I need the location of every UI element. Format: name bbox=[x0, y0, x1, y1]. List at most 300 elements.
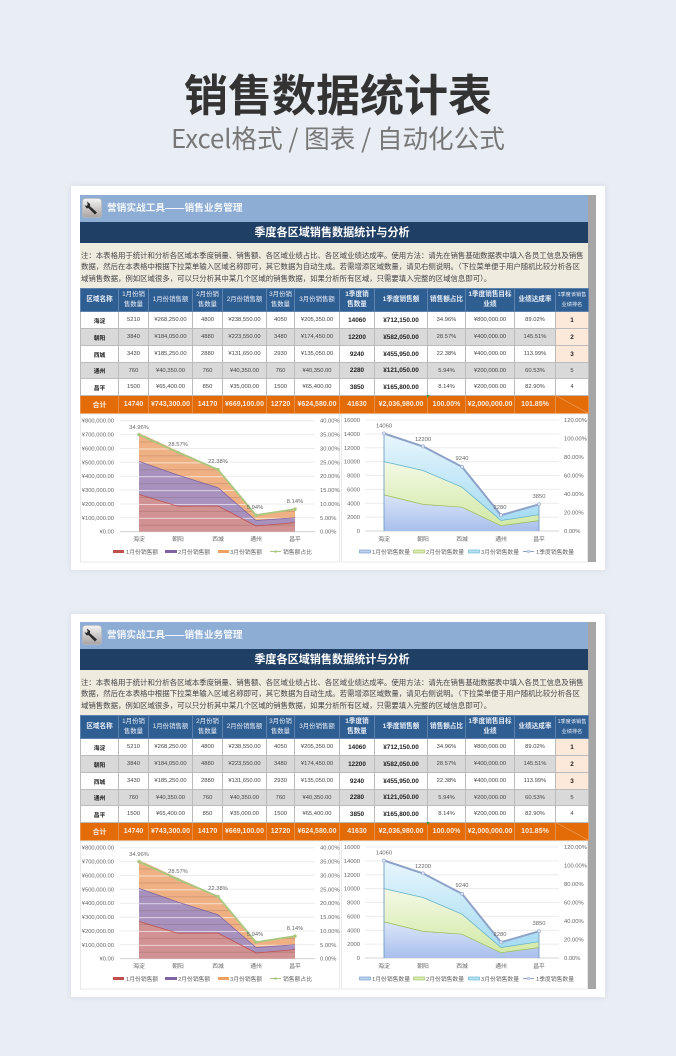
right axis: 5.00% bbox=[320, 943, 336, 949]
data labels: 22.38% bbox=[208, 886, 228, 892]
data table: 28.57% bbox=[437, 761, 456, 767]
category axis: 西城 bbox=[212, 963, 224, 970]
data table: ¥712,150.00 bbox=[383, 316, 419, 324]
data table: ¥40,350.00 bbox=[230, 368, 259, 374]
left axis: 10000 bbox=[344, 460, 360, 466]
data table: ¥238,550.00 bbox=[228, 744, 261, 750]
right axis: 40.00% bbox=[564, 919, 584, 925]
data table: 1 bbox=[570, 744, 574, 750]
data table: ¥800,000.00 bbox=[474, 317, 506, 323]
data table: 售数量 bbox=[271, 301, 290, 308]
left axis: 14000 bbox=[344, 432, 360, 438]
data table: ¥40,350.00 bbox=[302, 794, 332, 800]
left axis: 6000 bbox=[347, 487, 360, 493]
data labels: 9240 bbox=[456, 883, 468, 889]
left axis: ¥700,000.00 bbox=[82, 860, 114, 866]
line: quarterly quantity bbox=[382, 859, 541, 944]
category axis: 朝阳 bbox=[172, 535, 184, 543]
data table: 4 bbox=[570, 384, 574, 390]
data table: 14060 bbox=[348, 744, 366, 750]
data table: 2280 bbox=[350, 794, 364, 801]
data labels: 8.14% bbox=[287, 499, 303, 505]
data labels: 28.57% bbox=[168, 442, 188, 448]
data table: 1500 bbox=[274, 384, 287, 390]
category axis bbox=[378, 962, 545, 970]
legend: 1月份销售数量 bbox=[372, 975, 410, 983]
line: quarterly quantity bbox=[382, 432, 541, 517]
data table: 4800 bbox=[201, 317, 214, 323]
data table: ¥40,350.00 bbox=[230, 794, 259, 800]
data labels: 28.57% bbox=[168, 869, 188, 875]
data table: ¥200,000.00 bbox=[474, 811, 506, 817]
data table: ¥35,000.00 bbox=[230, 811, 259, 817]
heading: 季度各区域销售数据统计与分析 bbox=[254, 227, 410, 239]
category axis: 海淀 bbox=[378, 962, 390, 970]
left axis: 8000 bbox=[347, 900, 360, 906]
data table: 113.99% bbox=[524, 351, 546, 357]
charts bbox=[80, 822, 588, 990]
data table: 1月份销 bbox=[122, 290, 145, 298]
data table: ¥2,000,000.00 bbox=[468, 828, 512, 835]
legend: 1季度销售数量 bbox=[536, 548, 574, 556]
data table: 4 bbox=[570, 811, 574, 817]
legend: 1月份销售数量 bbox=[372, 548, 410, 556]
data table: ¥743,300.00 bbox=[151, 401, 190, 408]
data table: 5.94% bbox=[438, 794, 455, 800]
data table: 海淀 bbox=[94, 318, 105, 324]
category axis: 海淀 bbox=[133, 962, 145, 970]
data table: 4050 bbox=[274, 317, 287, 323]
right axis bbox=[564, 845, 587, 962]
data table: 850 bbox=[203, 384, 212, 390]
data table: 3850 bbox=[350, 810, 364, 818]
data table: ¥35,000.00 bbox=[230, 384, 259, 390]
data table: 760 bbox=[203, 794, 212, 800]
data table: 4050 bbox=[274, 744, 287, 750]
data table: 1500 bbox=[274, 811, 287, 817]
data table: ¥40,350.00 bbox=[156, 368, 185, 374]
left axis: ¥500,000.00 bbox=[82, 460, 114, 466]
panel: spreadsheet screenshot 2 bbox=[71, 614, 605, 997]
left axis: 0 bbox=[357, 529, 360, 535]
data table: 3月份销 bbox=[269, 718, 292, 724]
data table: ¥200,000.00 bbox=[474, 384, 506, 390]
data table: 3月份销售额 bbox=[299, 296, 335, 303]
data table: 14740 bbox=[124, 828, 143, 835]
data table: ¥131,650.00 bbox=[228, 351, 261, 357]
left axis: 6000 bbox=[347, 914, 360, 920]
header bar bbox=[80, 622, 588, 649]
legend: 3月份销售数量 bbox=[481, 975, 519, 983]
category axis: 昌平 bbox=[289, 536, 301, 543]
left axis: ¥100,000.00 bbox=[82, 516, 114, 522]
charts bbox=[80, 394, 588, 562]
data labels: 8.14% bbox=[287, 926, 303, 932]
panel: spreadsheet screenshot 1 bbox=[71, 186, 605, 570]
right gray strip bbox=[588, 622, 596, 989]
data table: 西城 bbox=[94, 352, 105, 358]
left axis: 16000 bbox=[344, 845, 360, 851]
data table: 760 bbox=[203, 368, 212, 374]
data table: 2 bbox=[570, 760, 574, 768]
icon: wrench bbox=[82, 625, 102, 645]
data table: 101.85% bbox=[521, 401, 549, 408]
category axis: 通州 bbox=[495, 962, 507, 970]
data table: ¥174,450.00 bbox=[301, 334, 333, 340]
data table: 12200 bbox=[348, 334, 366, 340]
data labels bbox=[129, 425, 303, 511]
right axis: 80.00% bbox=[564, 455, 584, 461]
data table: 西城 bbox=[94, 780, 105, 786]
header bar bbox=[80, 195, 588, 222]
left axis: ¥300,000.00 bbox=[82, 915, 114, 921]
left axis: 2000 bbox=[347, 515, 360, 521]
right axis: 15.00% bbox=[320, 488, 340, 494]
data table: ¥223,550.00 bbox=[228, 761, 261, 767]
right axis: 20.00% bbox=[320, 474, 340, 480]
data table: 区域名称 bbox=[86, 296, 113, 303]
data table: 9240 bbox=[350, 778, 364, 784]
category axis: 朝阳 bbox=[172, 962, 184, 970]
data table: 昌平 bbox=[94, 386, 105, 392]
legend bbox=[113, 548, 312, 556]
data table: ¥2,036,980.00 bbox=[379, 401, 423, 408]
right axis: 20.00% bbox=[320, 901, 340, 907]
data table: ¥135,050.00 bbox=[301, 778, 333, 784]
data table: 业绩 bbox=[483, 301, 497, 308]
data table: 2月份销售额 bbox=[227, 296, 262, 303]
data labels: 34.96% bbox=[129, 425, 149, 431]
data labels: 5.94% bbox=[247, 932, 263, 938]
right axis: 30.00% bbox=[320, 446, 340, 452]
data table: ¥400,000.00 bbox=[474, 351, 506, 357]
note text bbox=[80, 243, 588, 288]
left axis: ¥0.00 bbox=[99, 957, 114, 963]
data table: ¥205,350.00 bbox=[301, 317, 333, 323]
data table: 5 bbox=[570, 368, 574, 374]
category axis: 海淀 bbox=[133, 535, 145, 543]
data table: ¥121,050.00 bbox=[383, 794, 419, 801]
data table: ¥669,100.00 bbox=[225, 401, 264, 408]
category axis: 通州 bbox=[250, 962, 262, 970]
legend bbox=[113, 975, 312, 983]
right axis: 10.00% bbox=[320, 502, 340, 508]
data table: ¥65,400.00 bbox=[156, 811, 185, 817]
data table: ¥582,050.00 bbox=[383, 334, 419, 340]
data table: 2月份销售额 bbox=[227, 723, 262, 730]
data table: ¥65,400.00 bbox=[302, 384, 332, 390]
data table: ¥65,400.00 bbox=[302, 811, 332, 817]
data table: 3430 bbox=[127, 778, 140, 784]
right axis: 0.00% bbox=[564, 956, 580, 962]
data table: 22.38% bbox=[437, 351, 456, 357]
left axis: 10000 bbox=[344, 887, 360, 893]
data table: ¥743,300.00 bbox=[151, 828, 190, 835]
right axis: 5.00% bbox=[320, 516, 336, 522]
data table: 1月份销售额 bbox=[153, 296, 188, 303]
data table: 1月份销 bbox=[122, 718, 145, 724]
data table: 3850 bbox=[350, 384, 364, 390]
data table: 3840 bbox=[127, 761, 140, 767]
right axis: 20.00% bbox=[564, 510, 584, 516]
note text: 域销售数据，例如区域很多，可以只分析其中某几个区域的销售数据，如果分析所有区域，只需要填入完整的区域信息即可）。 bbox=[81, 701, 491, 710]
note text: 数据，然后在本表格中根据下拉菜单输入区域名称即可，其它数据为自动生成。若需增添区域数量，请见右侧说明。（下拉菜单便于用户随机比较分析各区 bbox=[81, 262, 580, 271]
left axis: ¥800,000.00 bbox=[82, 419, 114, 425]
left axis: 2000 bbox=[347, 942, 360, 948]
data table: 3430 bbox=[127, 351, 140, 357]
left axis: ¥200,000.00 bbox=[82, 502, 114, 508]
data labels: 3850 bbox=[533, 494, 545, 500]
right axis: 80.00% bbox=[564, 882, 584, 888]
data table: 销售额占比 bbox=[430, 296, 463, 303]
data table: 通州 bbox=[94, 369, 105, 375]
category axis: 西城 bbox=[456, 536, 468, 543]
data table: 2月份销 bbox=[196, 718, 219, 724]
data table: ¥800,000.00 bbox=[474, 744, 506, 750]
data table: 41630 bbox=[347, 828, 367, 835]
left axis: 0 bbox=[357, 956, 360, 962]
data table: 14740 bbox=[124, 401, 143, 408]
data table: 9240 bbox=[350, 350, 364, 358]
data table: 5.94% bbox=[438, 368, 455, 374]
data table: 2880 bbox=[201, 778, 214, 784]
data table: 售数量 bbox=[198, 301, 217, 308]
data table: ¥669,100.00 bbox=[225, 828, 264, 835]
data table: ¥624,580.00 bbox=[298, 828, 336, 835]
data table: ¥400,000.00 bbox=[474, 761, 506, 767]
data table: 4880 bbox=[201, 334, 214, 340]
data table: 60.53% bbox=[525, 794, 545, 800]
data labels: 14060 bbox=[376, 424, 392, 430]
data table: 3480 bbox=[274, 334, 287, 340]
data table: 5210 bbox=[127, 317, 140, 323]
right axis: 60.00% bbox=[564, 900, 584, 906]
left axis: 14000 bbox=[344, 859, 360, 865]
data table: 1季度销 bbox=[345, 290, 369, 298]
right axis: 0.00% bbox=[320, 957, 336, 963]
data table: 售数量 bbox=[347, 301, 367, 308]
data table: ¥455,950.00 bbox=[383, 350, 419, 358]
legend: 2月份销售数量 bbox=[426, 975, 464, 983]
data table: 业绩达成率 bbox=[519, 723, 551, 730]
data table: 1季度销售额 bbox=[383, 296, 419, 303]
line: sales share bbox=[137, 433, 297, 517]
data table: 22.38% bbox=[437, 778, 456, 784]
legend: 1月份销售额 bbox=[126, 975, 158, 983]
category axis: 通州 bbox=[250, 535, 262, 543]
data table: 34.96% bbox=[437, 317, 456, 323]
left axis: ¥700,000.00 bbox=[82, 433, 114, 439]
data table: 1季度销售目标 bbox=[468, 718, 512, 724]
data table: 5210 bbox=[127, 744, 140, 750]
category axis: 朝阳 bbox=[417, 535, 429, 543]
data labels: 2280 bbox=[494, 505, 506, 511]
category axis bbox=[378, 535, 545, 543]
data table: 业绩排名 bbox=[562, 302, 582, 308]
data table: 业绩排名 bbox=[562, 729, 582, 735]
data labels bbox=[376, 850, 545, 938]
data table: 业绩 bbox=[483, 728, 497, 735]
data table: 34.96% bbox=[437, 744, 456, 750]
data table: 区域名称 bbox=[86, 723, 113, 730]
data table: 2 bbox=[570, 334, 574, 340]
legend bbox=[360, 548, 574, 556]
data table: ¥582,050.00 bbox=[383, 760, 419, 768]
data table: 14170 bbox=[198, 828, 217, 835]
subtitle: Excel格式 / 图表 / 自动化公式 bbox=[171, 119, 505, 156]
data table: 760 bbox=[276, 368, 285, 374]
data table: ¥712,150.00 bbox=[383, 744, 419, 750]
data table: 1 bbox=[570, 316, 574, 324]
data table: 145.51% bbox=[524, 761, 546, 767]
data table: 101.85% bbox=[521, 828, 549, 835]
left axis: ¥0.00 bbox=[99, 530, 114, 536]
data table: 113.99% bbox=[524, 778, 546, 784]
note text: 注：本表格用于统计和分析各区域本季度销量、销售额、各区域业绩占比、各区域业绩达成率。使用方法：请先在销售基础数据表中填入各员工信息及销售 bbox=[81, 678, 584, 687]
data table: 14170 bbox=[198, 401, 217, 408]
line: sales share bbox=[137, 860, 297, 944]
data table: 2月份销 bbox=[196, 290, 219, 298]
legend: 3月份销售额 bbox=[230, 548, 262, 556]
data table: 2930 bbox=[274, 351, 287, 357]
data table bbox=[80, 715, 589, 841]
data table: 售数量 bbox=[198, 728, 217, 735]
data table: ¥268,250.00 bbox=[154, 317, 187, 323]
right axis: 0.00% bbox=[564, 529, 580, 535]
left axis bbox=[344, 845, 360, 962]
left axis: ¥600,000.00 bbox=[82, 446, 114, 452]
right axis bbox=[320, 419, 340, 536]
heading bbox=[80, 649, 588, 670]
data table: 合计 bbox=[92, 402, 106, 408]
category axis: 昌平 bbox=[533, 963, 545, 970]
right axis: 40.00% bbox=[564, 492, 584, 498]
data table: 2880 bbox=[201, 351, 214, 357]
data table: 5 bbox=[570, 794, 574, 800]
legend: 1月份销售额 bbox=[126, 548, 158, 556]
note text: 域销售数据，例如区域很多，可以只分析其中某几个区域的销售数据，如果分析所有区域，只需要填入完整的区域信息即可）。 bbox=[81, 274, 491, 283]
data table: ¥40,350.00 bbox=[302, 368, 332, 374]
data table: 业绩达成率 bbox=[519, 296, 551, 303]
data table: 100.00% bbox=[433, 828, 460, 835]
left axis: 16000 bbox=[344, 418, 360, 424]
category axis: 西城 bbox=[212, 536, 224, 543]
data table: 1500 bbox=[127, 384, 140, 390]
data table: 1季度该销售 bbox=[558, 292, 586, 298]
left axis: ¥100,000.00 bbox=[82, 943, 114, 949]
right axis: 100.00% bbox=[564, 864, 587, 870]
data table: 朝阳 bbox=[94, 336, 105, 342]
category axis bbox=[133, 962, 301, 970]
data table: ¥184,050.00 bbox=[154, 334, 187, 340]
left axis: 4000 bbox=[347, 928, 360, 934]
data table: ¥165,800.00 bbox=[383, 384, 419, 390]
data table: ¥121,050.00 bbox=[383, 367, 419, 374]
right axis: 35.00% bbox=[320, 433, 340, 439]
data table: ¥185,250.00 bbox=[154, 351, 187, 357]
data table: 1月份销售额 bbox=[153, 723, 188, 730]
data labels: 14060 bbox=[376, 850, 392, 856]
data table: 760 bbox=[129, 794, 138, 800]
data table: ¥223,550.00 bbox=[228, 334, 261, 340]
note text bbox=[80, 670, 588, 715]
category axis bbox=[133, 535, 301, 543]
data table: 89.02% bbox=[525, 744, 545, 750]
data table: ¥238,550.00 bbox=[228, 317, 261, 323]
data table: 12200 bbox=[348, 760, 366, 768]
data table: ¥135,050.00 bbox=[301, 351, 333, 357]
chart: sales quantity area bbox=[342, 841, 588, 989]
data table: 售数量 bbox=[124, 301, 143, 308]
right axis: 120.00% bbox=[564, 418, 587, 424]
data table: 3月份销 bbox=[269, 290, 292, 298]
header bar title: 营销实战工具——销售业务管理 bbox=[107, 203, 243, 214]
data table: ¥268,250.00 bbox=[154, 744, 187, 750]
header bar title: 营销实战工具——销售业务管理 bbox=[107, 630, 243, 641]
data labels: 22.38% bbox=[208, 459, 228, 465]
category axis: 昌平 bbox=[289, 963, 301, 970]
data table: 3480 bbox=[274, 761, 287, 767]
category axis: 昌平 bbox=[533, 536, 545, 543]
data table: ¥400,000.00 bbox=[474, 334, 506, 340]
legend: 2月份销售数量 bbox=[426, 548, 464, 556]
data table: 1季度销售目标 bbox=[468, 290, 512, 298]
left axis bbox=[82, 419, 114, 536]
data table: 售数量 bbox=[347, 728, 367, 735]
right axis: 10.00% bbox=[320, 929, 340, 935]
data table: 850 bbox=[203, 811, 212, 817]
data table: 4800 bbox=[201, 744, 214, 750]
right axis: 20.00% bbox=[564, 938, 584, 944]
data labels bbox=[376, 424, 545, 511]
data table: 41630 bbox=[347, 401, 367, 408]
data table bbox=[80, 288, 589, 414]
left axis: ¥300,000.00 bbox=[82, 488, 114, 494]
data table: 海淀 bbox=[94, 746, 105, 752]
right axis: 25.00% bbox=[320, 887, 340, 893]
data table: ¥184,050.00 bbox=[154, 761, 187, 767]
right axis: 60.00% bbox=[564, 474, 584, 480]
data table: 朝阳 bbox=[94, 762, 105, 768]
data table: ¥200,000.00 bbox=[474, 794, 506, 800]
data table: 1季度销 bbox=[345, 718, 369, 724]
data table: 1500 bbox=[127, 811, 140, 817]
data table: 12720 bbox=[271, 401, 290, 408]
data table: 合计 bbox=[92, 828, 106, 836]
data table: 82.90% bbox=[525, 811, 545, 817]
heading: 季度各区域销售数据统计与分析 bbox=[254, 654, 410, 666]
data table: 售数量 bbox=[271, 728, 290, 735]
right axis: 25.00% bbox=[320, 460, 340, 466]
right axis: 40.00% bbox=[320, 846, 340, 852]
data table: ¥400,000.00 bbox=[474, 778, 506, 784]
category axis: 通州 bbox=[495, 535, 507, 543]
data table: 60.53% bbox=[525, 368, 545, 374]
right gray strip bbox=[588, 195, 596, 562]
data labels: 12200 bbox=[415, 437, 431, 443]
legend: 销售额占比 bbox=[283, 548, 312, 556]
data table: 760 bbox=[129, 368, 138, 374]
data labels: 34.96% bbox=[129, 852, 149, 858]
data table: 145.51% bbox=[524, 334, 546, 340]
data table: ¥2,000,000.00 bbox=[468, 401, 512, 408]
data table: 1季度销售额 bbox=[383, 723, 419, 730]
data table: ¥455,950.00 bbox=[383, 778, 419, 784]
legend bbox=[360, 975, 574, 983]
data table: ¥624,580.00 bbox=[298, 401, 336, 408]
data table: 4880 bbox=[201, 761, 214, 767]
right axis: 15.00% bbox=[320, 915, 340, 921]
